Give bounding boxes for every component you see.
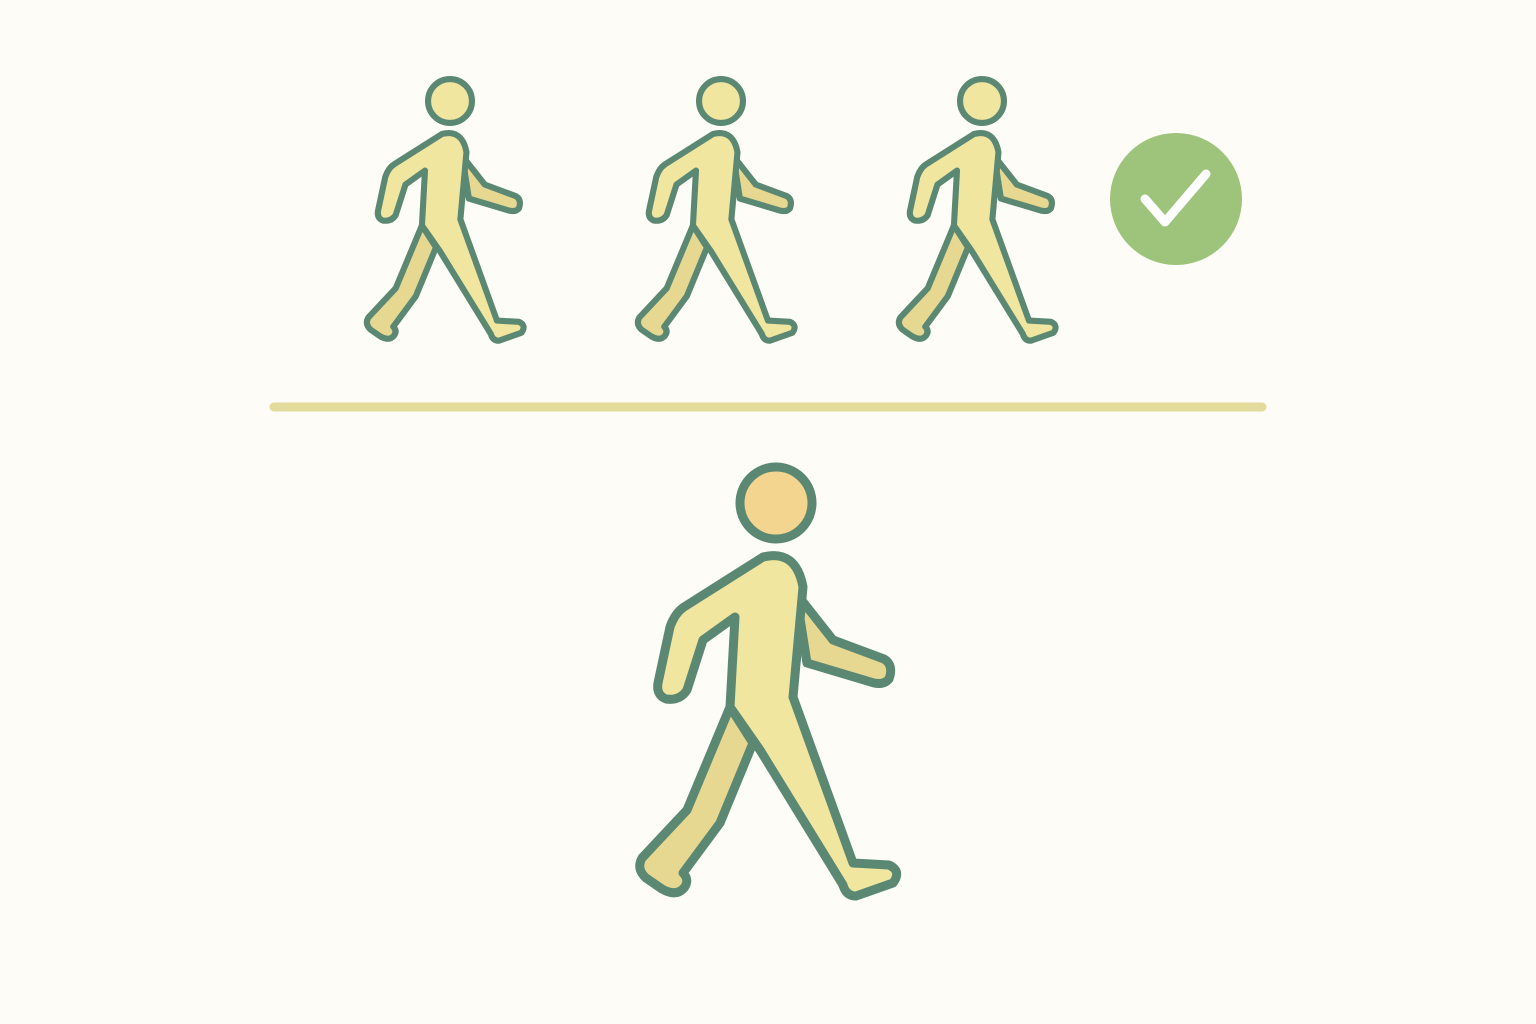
large walker [640, 467, 897, 896]
icon: check badge [1110, 133, 1242, 265]
walker 1 [367, 79, 524, 341]
walker 3 [899, 79, 1056, 341]
walker 2 [638, 79, 795, 341]
